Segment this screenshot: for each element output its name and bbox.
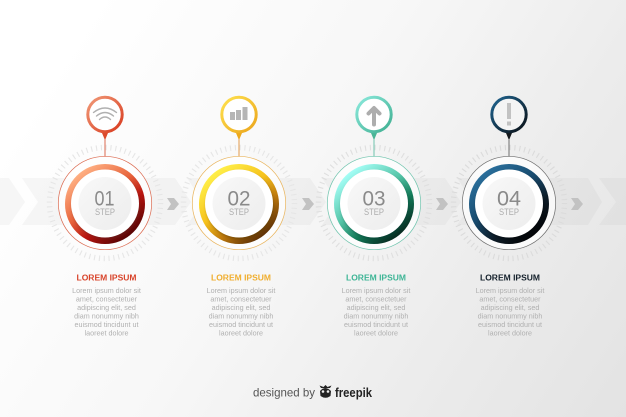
thick ring 2 (199, 164, 279, 244)
body text 3: diam nonummy nibh (344, 312, 408, 320)
body text 3: amet, consectetuer (345, 294, 407, 304)
tick ring 1 (50, 148, 160, 258)
body text 2: Lorem ipsum dolor sit (207, 286, 275, 295)
body text 4: diam nonummy nibh (478, 312, 542, 320)
body text 1: amet, consectetuer (76, 294, 138, 304)
step 2 label: 02 (228, 188, 250, 211)
connector and outer ring 4 (462, 133, 556, 250)
pin 3 with arrow icon (357, 97, 391, 139)
body text 4: adipiscing elit, sed (481, 303, 539, 312)
white disc 3 (340, 170, 409, 240)
thick ring 4 (469, 164, 549, 244)
connector and outer ring 1 (58, 133, 152, 250)
connector and outer ring 2 (192, 133, 286, 250)
body text 3: laoreet dolore (354, 328, 398, 338)
body text 2 (207, 286, 275, 338)
thick ring 1 (65, 164, 145, 244)
body text 1: laoreet dolore (85, 328, 128, 338)
pin 1 with wifi icon (88, 97, 122, 139)
tick ring 2 (184, 148, 294, 258)
body text 4: amet, consectetuer (479, 294, 541, 304)
body text 4: Lorem ipsum dolor sit (476, 286, 544, 295)
connector and outer ring 3 (327, 133, 421, 250)
body text 1 (72, 286, 141, 338)
step 2 (184, 97, 294, 338)
body text 1: diam nonummy nibh (74, 312, 139, 320)
body text 2: diam nonummy nibh (209, 312, 273, 320)
body text 2: euismod tincidunt ut (209, 320, 273, 329)
small arrows (167, 198, 583, 210)
body text 1: euismod tincidunt ut (75, 320, 138, 329)
icon: freepik mascot (320, 385, 332, 398)
body text 3 (342, 286, 410, 338)
white disc 2 (205, 170, 274, 240)
body text 3: Lorem ipsum dolor sit (342, 286, 410, 295)
body text 2: laoreet dolore (219, 328, 263, 338)
body text 4 (476, 286, 544, 338)
body text 1: Lorem ipsum dolor sit (72, 286, 141, 295)
heading 3: LOREM IPSUM (346, 272, 406, 282)
tick ring 4 (454, 148, 564, 258)
step 4 label: STEP (499, 206, 519, 217)
pin 2 with bars icon (222, 97, 256, 139)
thick ring 3 (334, 164, 414, 244)
pin 4 with exclamation icon (492, 97, 526, 139)
body text 2: adipiscing elit, sed (212, 303, 270, 312)
body text 1: adipiscing elit, sed (77, 303, 136, 312)
step 1 label: 01 (94, 188, 114, 211)
step 4 (454, 97, 564, 338)
footer credit: freepik (335, 386, 372, 400)
body text 3: adipiscing elit, sed (347, 303, 405, 312)
tick ring 3 (318, 148, 430, 258)
step 3 label: STEP (364, 206, 384, 217)
step 1 (50, 97, 160, 338)
white disc 1 (71, 170, 140, 240)
heading 2: LOREM IPSUM (211, 272, 271, 282)
body text 4: laoreet dolore (488, 328, 532, 338)
body text 4: euismod tincidunt ut (478, 320, 542, 329)
heading 1: LOREM IPSUM (76, 272, 136, 282)
step 3 label: 03 (362, 188, 386, 211)
chevron band (0, 178, 626, 225)
body text 2: amet, consectetuer (210, 294, 272, 304)
heading 4: LOREM IPSUM (480, 272, 540, 282)
step 2 label: STEP (229, 206, 249, 217)
white disc 4 (475, 170, 544, 240)
step 1 label: STEP (95, 206, 115, 217)
step 3 (318, 97, 430, 338)
footer credit (253, 385, 372, 400)
footer credit: designed by (253, 386, 315, 400)
step 4 label: 04 (497, 188, 521, 211)
body text 3: euismod tincidunt ut (344, 320, 408, 329)
